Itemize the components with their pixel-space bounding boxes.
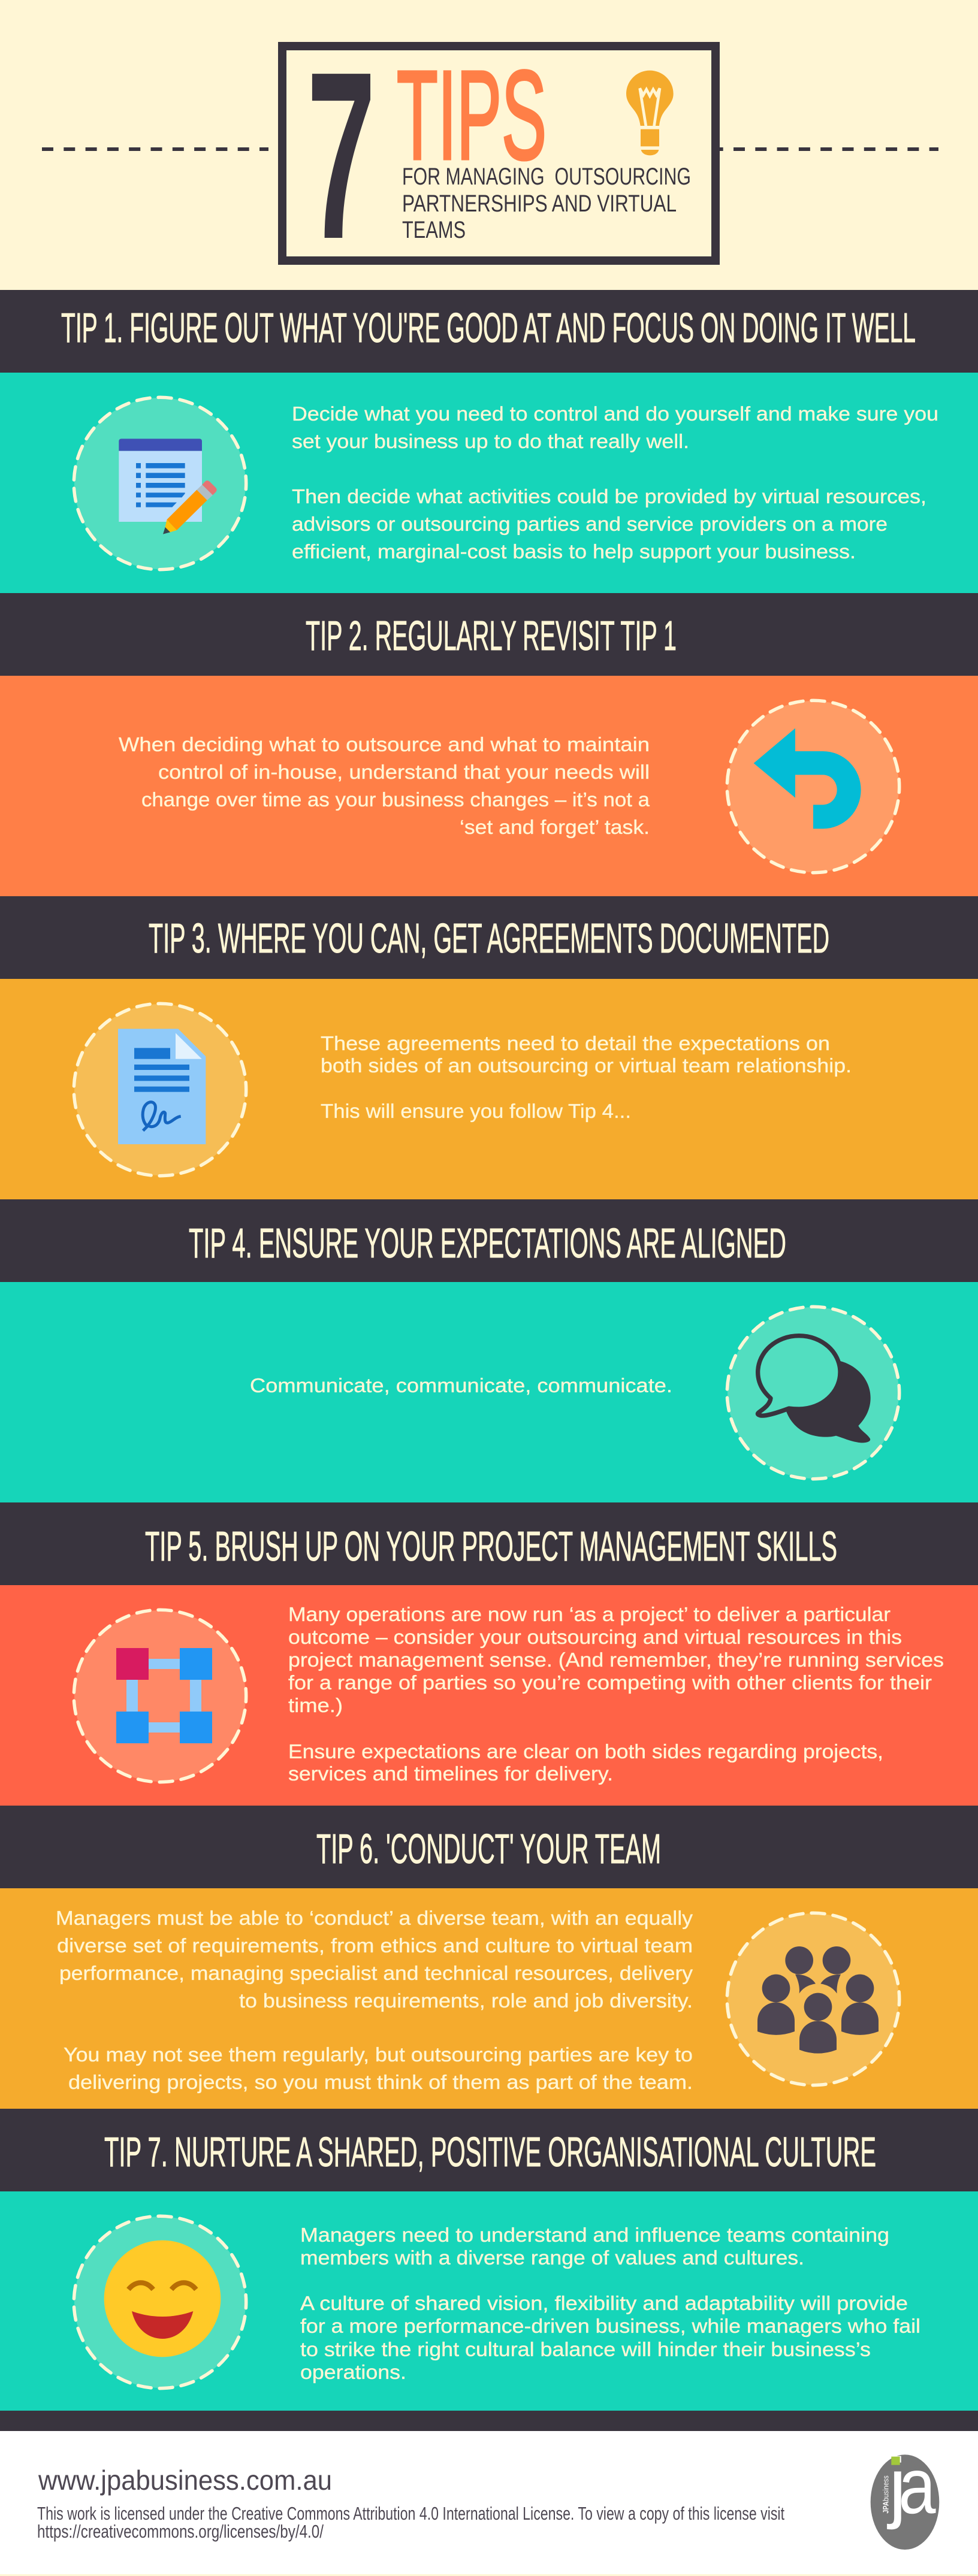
dashed rule left [42,147,268,151]
content background: tip 2 [0,676,978,896]
panel: tip 5 [0,1502,978,1806]
subtitle: TEAMS [402,217,466,243]
heading band: tip 3 [0,896,978,979]
text: tip 5: services and timelines for delivery. [288,1762,613,1785]
text: tip 7: for a more performance-driven business, while managers who fail [300,2315,920,2337]
text: tip 5: Many operations are now run ‘as a project’ to deliver a particular [288,1603,891,1625]
heading band: tip 2: TIP 2. REGULARLY REVISIT TIP 1 [306,612,677,659]
icon: smiling face [67,2209,253,2395]
panel: tip 7 [0,2109,978,2411]
panel: tip 1 [0,290,978,593]
closing dark band [0,2411,978,2431]
text: tip 6: Managers must be able to ‘conduct’ a diverse team, with an equally [56,1907,693,1929]
panel: tip 2 [0,593,978,896]
content background: tip 7 [0,2191,978,2411]
text: tip 6 [56,1907,693,2093]
text: tip 6: to business requirements, role and job diversity. [239,1990,693,2012]
icon: group of people [720,1906,906,2092]
text: tip 7: operations. [300,2361,406,2383]
heading band: tip 5 [0,1502,978,1585]
text: tip 7: to strike the right cultural balance will hinder their business’s [300,2338,871,2360]
text: tip 7: A culture of shared vision, flexibility and adaptability will provide [300,2292,908,2314]
subtitle [402,164,691,243]
text: tip 7: Managers need to understand and influence teams containing [300,2224,889,2246]
text: tip 2: ‘set and forget’ task. [460,816,650,838]
text: tip 5 [288,1603,944,1785]
text: tip 1: Then decide what activities could be provided by virtual resources, [292,485,926,507]
heading band: tip 6 [0,1806,978,1888]
title frame [282,46,716,261]
text: tip 7: members with a diverse range of values and cultures. [300,2247,804,2269]
text: tip 1: Decide what you need to control and do yourself and make sure you [292,403,938,425]
website address: www.jpabusiness.com.au [38,2465,332,2496]
text: tip 2 [119,733,650,838]
icon: signed document [67,997,253,1183]
text: tip 5: outcome – consider your outsourcing and virtual resources in this [288,1626,902,1648]
icon: light bulb [626,71,674,155]
text: tip 5: time.) [288,1694,343,1716]
header: title block [42,23,938,289]
subtitle: FOR MANAGING OUTSOURCING [402,164,691,190]
heading band: tip 6: TIP 6. 'CONDUCT' YOUR TEAM [316,1825,661,1872]
heading band: tip 4 [0,1199,978,1282]
text: tip 1: set your business up to do that really well. [292,430,689,452]
footer [0,2431,978,2574]
text: tip 1: efficient, marginal-cost basis to help support your business. [292,540,856,563]
panel: tip 4 [0,1199,978,1502]
logo: JPA business: j [886,2442,907,2530]
big numeral 7: 7 [307,23,376,289]
icon: project network [67,1603,253,1789]
content background: tip 5 [0,1585,978,1806]
icon: curved back arrow [720,694,906,879]
text: tip 5: for a range of parties so you’re competing with other clients for their [288,1671,932,1694]
text: tip 2: control of in-house, understand that your needs will [158,761,650,783]
panel: tip 3 [0,896,978,1199]
text: tip 5: project management sense. (And remember, they’re running services [288,1649,944,1671]
heading band: tip 2 [0,593,978,676]
text: tip 7 [300,2224,920,2383]
subtitle: PARTNERSHIPS AND VIRTUAL [402,191,677,217]
panel: tip 6 [0,1806,978,2109]
text: tip 1: advisors or outsourcing parties and service providers on a more [292,513,888,535]
content background: tip 6 [0,1888,978,2109]
text: tip 2: change over time as your business changes – it’s not a [141,788,650,811]
licence note [37,2503,784,2542]
text: tip 3: both sides of an outsourcing or virtual team relationship. [321,1054,852,1077]
text: tip 3: This will ensure you follow Tip 4... [321,1100,631,1122]
text: tip 3 [321,1032,852,1122]
text: tip 6: diverse set of requirements, from ethics and culture to virtual team [57,1934,693,1957]
text: tip 6: delivering projects, so you must think of them as part of the team. [68,2071,693,2093]
word TIPS: TIPS [397,44,547,186]
heading band: tip 7 [0,2109,978,2191]
content background: tip 3 [0,979,978,1199]
licence note: https://creativecommons.org/licenses/by/4.0/ [37,2521,324,2542]
logo: JPA business: JPAbusiness [882,2475,891,2514]
logo: JPA business: a [898,2441,936,2530]
text: tip 6: performance, managing specialist and technical resources, delivery [59,1962,693,1984]
icon: notepad and pencil [67,391,253,576]
dashed rule right [712,147,938,151]
text: tip 5: Ensure expectations are clear on both sides regarding projects, [288,1740,883,1762]
text: tip 1 [292,403,938,563]
icon: speech bubbles [720,1300,906,1486]
text: tip 3: These agreements need to detail the expectations on [321,1032,830,1054]
content background: tip 4 [0,1282,978,1502]
text: tip 6: You may not see them regularly, but outsourcing parties are key to [64,2043,693,2066]
content background: tip 1 [0,373,978,593]
text: tip 4: Communicate, communicate, communicate. [250,1374,672,1396]
heading band: tip 1 [0,290,978,373]
logo: JPA business [871,2441,939,2550]
text: tip 2: When deciding what to outsource and what to maintain [119,733,650,755]
